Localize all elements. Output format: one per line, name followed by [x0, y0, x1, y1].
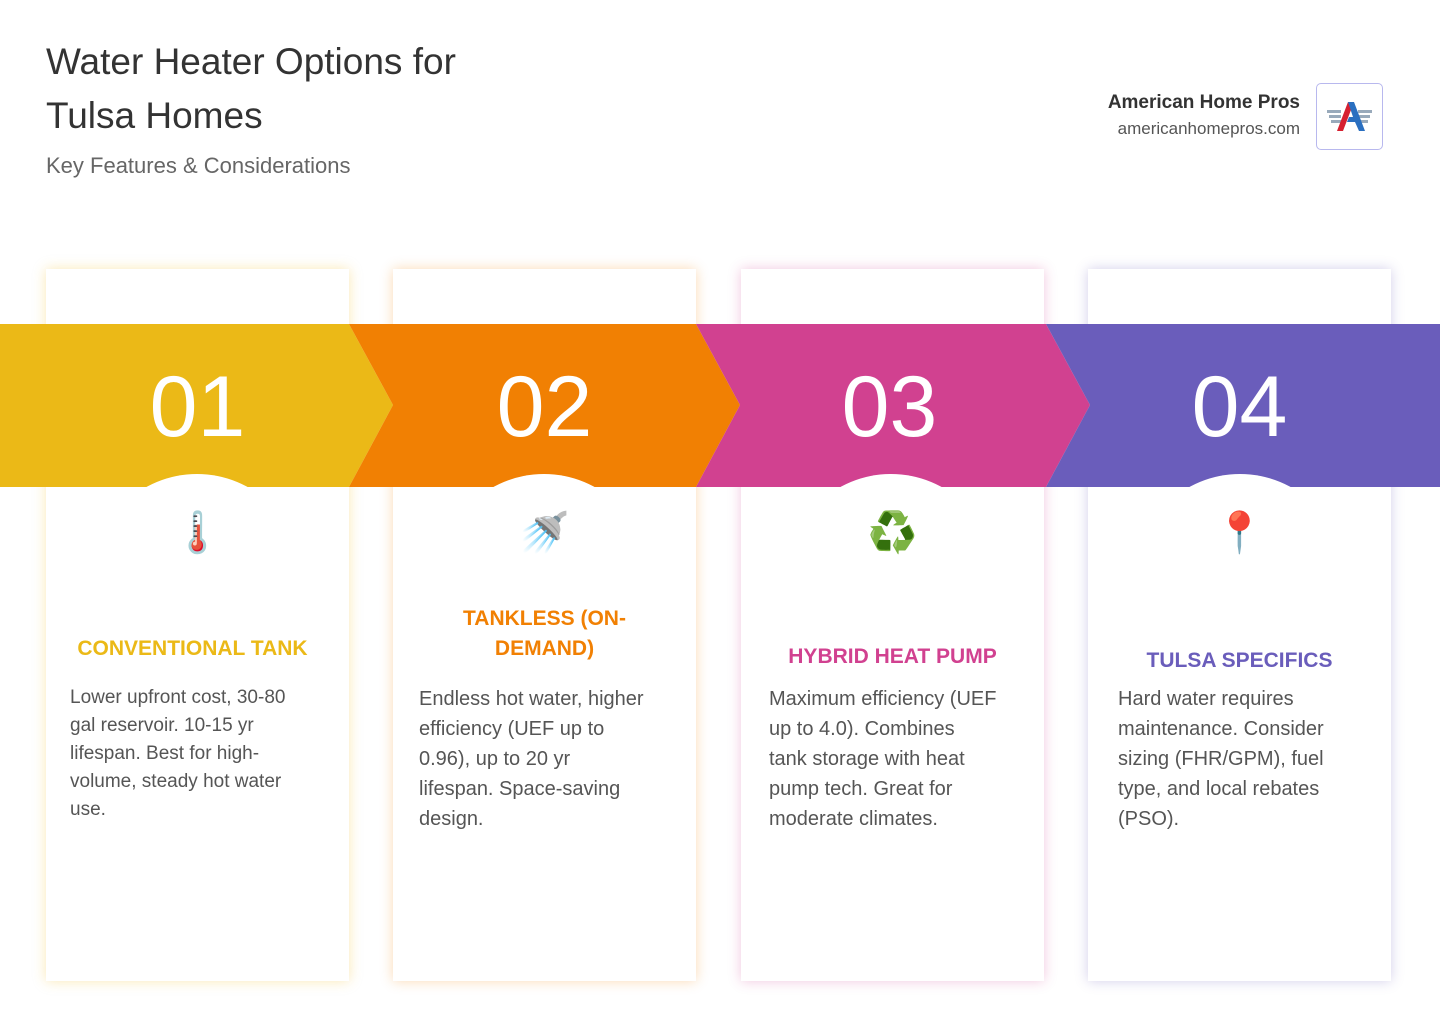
body	[419, 688, 644, 830]
subtitle: Key Features & Considerations	[46, 153, 350, 178]
body: use.	[70, 799, 106, 820]
body: sizing (FHR/GPM), fuel	[1118, 748, 1324, 770]
title	[46, 41, 456, 136]
body: volume, steady hot water	[70, 771, 281, 792]
body	[769, 688, 996, 830]
number 04: 04	[1192, 359, 1287, 455]
title: Water Heater Options for	[46, 41, 456, 82]
card 4	[1088, 269, 1391, 981]
body: design.	[419, 808, 484, 830]
icon: shower: 🚿	[520, 511, 569, 555]
body	[70, 687, 285, 820]
card 2	[393, 269, 696, 981]
number 03: 03	[842, 359, 937, 455]
body: Endless hot water, higher	[419, 688, 644, 710]
card 1 text	[70, 637, 308, 820]
brand text: American Home Pros	[1108, 92, 1300, 113]
body	[1118, 688, 1324, 830]
card 3 text	[769, 645, 997, 830]
icon: thermometer: 🌡️	[173, 511, 222, 555]
brand text: americanhomepros.com	[1118, 119, 1300, 138]
body: 0.96), up to 20 yr	[419, 748, 570, 770]
number 02: 02	[497, 359, 592, 455]
card 2 text	[419, 607, 644, 830]
body: efficiency (UEF up to	[419, 718, 604, 740]
body: pump tech. Great for	[769, 778, 952, 800]
card 1	[46, 269, 349, 981]
brand	[1108, 83, 1383, 150]
body: up to 4.0). Combines	[769, 718, 955, 740]
body: lifespan. Best for high-	[70, 743, 259, 764]
brand text	[1108, 92, 1300, 138]
icon: recycle: ♻️	[868, 511, 917, 555]
body: Lower upfront cost, 30-80	[70, 687, 285, 708]
heading: HYBRID HEAT PUMP	[788, 645, 997, 668]
body: moderate climates.	[769, 808, 938, 830]
body: Maximum efficiency (UEF	[769, 688, 996, 710]
card 3	[741, 269, 1044, 981]
body: (PSO).	[1118, 808, 1179, 830]
title: Tulsa Homes	[46, 95, 263, 136]
body: maintenance. Consider	[1118, 718, 1324, 740]
card 4 text	[1118, 649, 1332, 830]
body: type, and local rebates	[1118, 778, 1319, 800]
heading: CONVENTIONAL TANK	[77, 637, 308, 660]
body: Hard water requires	[1118, 688, 1294, 710]
body: gal reservoir. 10-15 yr	[70, 715, 254, 736]
body: lifespan. Space-saving	[419, 778, 620, 800]
icon: pin: 📍	[1215, 511, 1264, 555]
logo	[1316, 83, 1383, 150]
body: tank storage with heat	[769, 748, 965, 770]
heading: TULSA SPECIFICS	[1147, 649, 1332, 672]
heading: TANKLESS (ON-DEMAND)	[463, 607, 626, 660]
number 01: 01	[150, 359, 245, 455]
